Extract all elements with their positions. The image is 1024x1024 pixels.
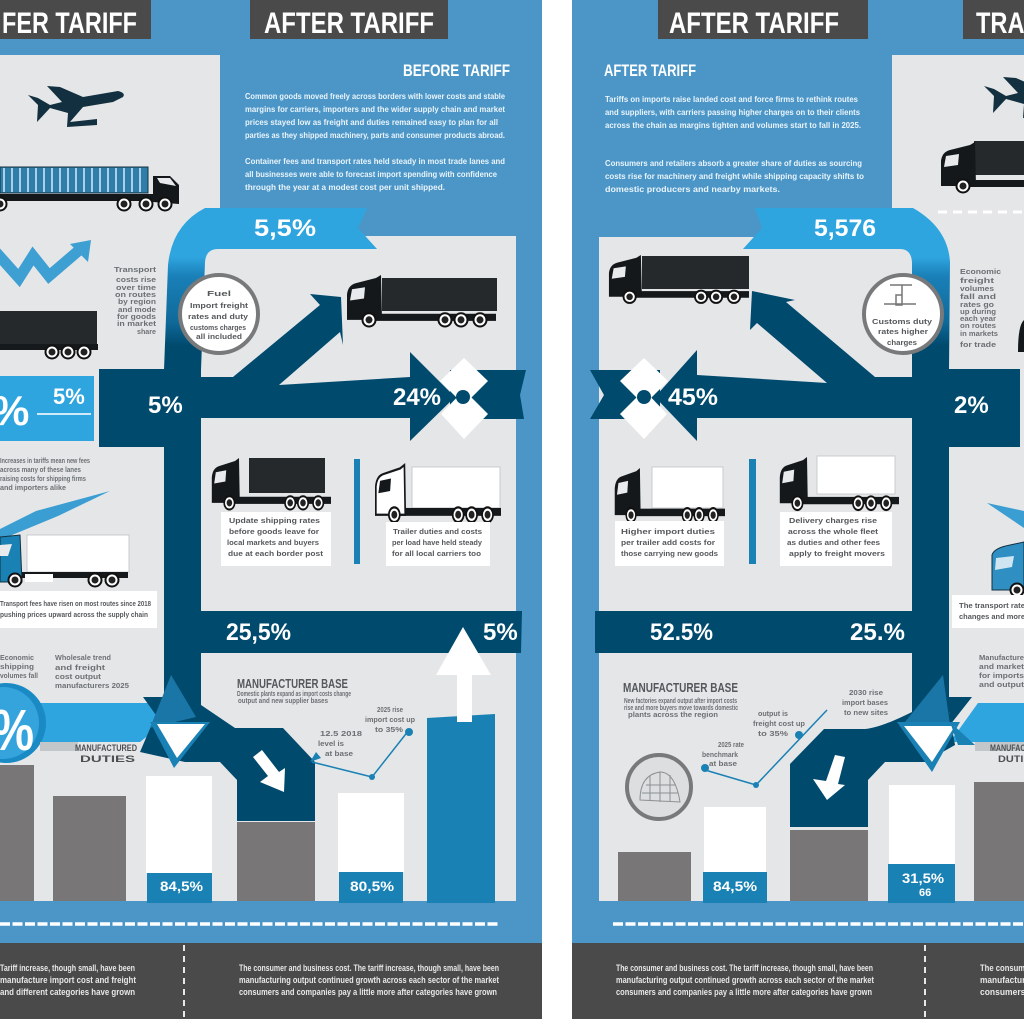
- card: right truck note one: [615, 521, 724, 566]
- callout: right circular badge with icon: [864, 275, 942, 353]
- label: left manufactured duties: [40, 742, 137, 764]
- divider: bottom dashed rule left: [0, 922, 500, 926]
- text block: before tariff description: Container fees and transport rates held steady in most trade lanes and: [245, 156, 505, 166]
- chart: left trend line with labels: level is: [318, 739, 344, 748]
- text block: right footer first column: consumers and companies pay a little more after categories have grown: [616, 987, 872, 998]
- value: band 52.5%: 52.5%: [650, 619, 713, 646]
- card: right truck note: for all local carriers too: [392, 549, 481, 558]
- divider: left vertical bar: [354, 459, 360, 564]
- divider: bottom dashed rule right: [613, 922, 1024, 926]
- card: right truck note two: as duties and other fees: [787, 538, 880, 547]
- icon: right clipped truck edge: [1018, 320, 1024, 352]
- text block: before tariff description: margins for carriers, importers and the wider supply chain and market: [245, 104, 505, 114]
- callout: left circular badge: all included: [196, 332, 242, 341]
- text block: right gray column: on routes: [960, 321, 996, 330]
- icon: left plane: [28, 86, 124, 127]
- text block: right manufacturer base: [623, 680, 738, 719]
- icon: right blue wedge: [987, 503, 1024, 528]
- text block: after tariff description: across the chain as margins tighten and volumes start to fall in 2025.: [605, 120, 861, 130]
- text block: left manufacturer base: output and new supplier bases: [238, 696, 328, 705]
- card: left truck note: before goods leave for: [229, 527, 319, 536]
- label: left manufactured duties: DUTIES: [80, 754, 135, 764]
- panel: right gray content area: [599, 55, 1024, 901]
- card: right truck note one: per trailer add costs for: [621, 538, 715, 547]
- bar chart: right bars: [618, 782, 1024, 903]
- card: right truck note two: [780, 512, 892, 566]
- callout: left circular badge: Fuel: [207, 289, 231, 298]
- text block: left small column two: cost output: [55, 672, 102, 681]
- card: left white note: pushing prices upward across the supply chain: [0, 610, 148, 619]
- text block: left footer second column: The consumer and business cost. The tariff increase, though small, have been: [239, 963, 499, 974]
- text block: left footer first column: Tariff increase, though small, have been: [0, 963, 135, 974]
- chart: left trend line with labels: to 35%: [375, 725, 403, 734]
- arrow: white up arrow: [436, 627, 491, 722]
- chart: right trend line with labels: to 35%: [758, 729, 788, 738]
- value: band 5%: 5%: [483, 619, 518, 646]
- icon: right white down arrow: [813, 755, 845, 800]
- text block: left footer first column: manufacture import cost and freight: [0, 975, 137, 986]
- card: right truck note: per load have held steady: [392, 538, 483, 547]
- value: right band 45%: 45%: [668, 384, 718, 411]
- text block: right footer first column: [616, 963, 875, 998]
- text block: right footer first column: manufacturing output continued growth across each sector of the market: [616, 975, 875, 986]
- value: band 25.%: 25.%: [850, 619, 905, 646]
- icon: right lower white truck one: [615, 467, 725, 523]
- card: right truck note two: Delivery charges rise: [789, 516, 877, 525]
- text block: left gray paragraph: [0, 456, 90, 492]
- panel: left gray content area: [0, 55, 516, 901]
- text block: left gray column: share: [137, 327, 156, 336]
- icon: lower dark truck: [212, 458, 331, 511]
- text block: left gray paragraph: across many of these lanes: [0, 465, 81, 474]
- value: right band 2%: 2%: [954, 392, 989, 419]
- text block: after tariff description: [605, 94, 864, 194]
- icon: left container truck: [0, 167, 179, 212]
- arrow: left top ribbon with vertical flow: [164, 208, 377, 370]
- text block: after tariff description: domestic producers and nearby markets.: [605, 184, 780, 194]
- card: left white note: Transport fees have risen on most routes since 2018: [0, 599, 151, 608]
- text block: left gray paragraph: and importers alike: [0, 483, 66, 492]
- divider: right dashed rule: [938, 210, 1024, 214]
- text block: after tariff description: and suppliers, with carriers passing higher charges on to their clients: [605, 107, 860, 117]
- text block: right footer first column: The consumer and business cost. The tariff increase, though small, have been: [616, 963, 873, 974]
- chart: left trend line with labels: 12.5 2018: [320, 729, 362, 738]
- text block: left small column one: volumes fall: [0, 671, 38, 680]
- text block: after tariff description: costs rise for machinery and freight while shipping capacity shifts to: [605, 171, 864, 181]
- text block: left gray column: Transport: [114, 265, 157, 274]
- text block: left gray paragraph: raising costs for shipping firms: [0, 474, 86, 483]
- value: bar 31.5% right: 31,5%: [902, 870, 945, 886]
- callout: right circular badge with icon: charges: [887, 338, 917, 347]
- icon: left clipped dark truck: [0, 311, 98, 360]
- text block: before tariff description: [245, 91, 505, 192]
- text block: left gray column: costs rise: [116, 275, 156, 284]
- text block: right gray column: [960, 267, 1001, 349]
- chart: right trend line with labels: benchmark: [702, 750, 739, 759]
- label: right manufactured duties: [975, 742, 1024, 764]
- text block: before tariff description: all businesses were able to forecast import spending with confidence: [245, 169, 497, 179]
- text block: right small column: Manufacture: [979, 653, 1024, 662]
- text block: left small column one: shipping: [0, 662, 34, 671]
- text block: right gray column: up during: [960, 307, 996, 316]
- text block: left footer second column: [239, 963, 500, 998]
- heading tab: clipped right trade: [963, 0, 1024, 40]
- text block: right manufacturer base: plants across the region: [628, 710, 718, 719]
- text block: left gray column: and mode: [118, 305, 156, 314]
- icon: right blue truck: [992, 542, 1024, 598]
- heading tab: left clipped after tariff: FER TARIFF: [2, 7, 137, 40]
- icon: left blue truck with white trailer: [0, 535, 129, 588]
- label: left manufactured duties: MANUFACTURED: [75, 743, 137, 753]
- value: bar 31.5% right: [902, 870, 945, 899]
- text block: right manufacturer base: MANUFACTURER BASE: [623, 680, 738, 695]
- card: left truck note: [221, 512, 331, 566]
- text block: left footer first column: and different categories have grown: [0, 987, 135, 998]
- chart: right trend line with labels: 2030 rise: [849, 688, 883, 697]
- value: band 25.5%: 25,5%: [226, 619, 291, 646]
- card: left white note: [0, 591, 157, 628]
- text block: after tariff description: Consumers and retailers absorb a greater share of duties as sourcing: [605, 158, 862, 168]
- icon: right dark truck: [609, 255, 749, 304]
- text block: left footer second column: manufacturing output continued growth across each sector of the market: [239, 975, 500, 986]
- callout: left circular badge: rates and duty: [188, 312, 249, 321]
- heading tab: after tariff: [250, 0, 448, 40]
- text block: right gray column: volumes: [960, 284, 994, 293]
- text block: right small column: for imports: [979, 671, 1024, 680]
- chart: left trend line with labels: at base: [325, 749, 353, 758]
- text block: before tariff description: prices stayed low as freight and duties remained easy to plan for all: [245, 117, 498, 127]
- icon: right diamond marker: [620, 358, 668, 439]
- bar chart: left bars: [0, 714, 495, 903]
- text block: left small column one: Economic: [0, 653, 34, 662]
- text block: left manufacturer base: MANUFACTURER BASE: [237, 676, 348, 691]
- text block: right small column: [979, 653, 1024, 689]
- callout: right circular badge with icon: rates higher: [878, 327, 928, 336]
- text block: right small column: and market: [979, 662, 1024, 671]
- callout: left circular badge: customs charges: [190, 323, 246, 332]
- card: right truck note two: across the whole fleet: [788, 527, 879, 536]
- text block: right gray column: Economic: [960, 267, 1001, 276]
- arrow: left bent navy flow into bar: [140, 705, 315, 821]
- chart: right trend line with labels: to new sites: [844, 708, 888, 717]
- text block: left gray column: [114, 265, 157, 336]
- callout: left circular badge: [180, 275, 258, 353]
- callout: left circular badge: Import freight: [190, 301, 249, 310]
- arrow: left light blue ribbon: [30, 703, 165, 742]
- text block: before tariff description: Common goods moved freely across borders with lower costs and stable: [245, 91, 505, 101]
- text block: left gray paragraph: Increases in tariffs mean new fees: [0, 456, 90, 465]
- text block: left gray column: for goods: [117, 312, 156, 321]
- text block: left manufacturer base: [237, 676, 351, 705]
- text block: right footer second column: [980, 963, 1024, 998]
- value: bar 80.5%: 80,5%: [350, 878, 395, 894]
- card: left truck note: due at each border post: [228, 549, 324, 558]
- arrow: right navy flow with horizontal arrow and diagonal branch: [590, 291, 1020, 715]
- text block: before tariff description: through the year at a modest cost per unit shipped.: [245, 182, 445, 192]
- panel: left bottom dark footer: [0, 943, 542, 1019]
- text block: right manufacturer base: rise and more buyers move towards domestic: [624, 703, 738, 712]
- card: right white note: The transport rate: [959, 601, 1024, 610]
- text block: right gray column: fall and: [960, 292, 997, 301]
- text block: left small column two: [55, 653, 129, 690]
- value: bar 84.5% right: 84,5%: [713, 878, 758, 894]
- text block: left footer second column: consumers and companies pay a little more after categories have grown: [239, 987, 497, 998]
- icon: left diamond marker: [440, 358, 488, 439]
- icon: lower white truck: [376, 465, 501, 523]
- chart: right trend line with labels: freight cost up: [753, 719, 805, 728]
- text block: left gray column: in market: [117, 319, 157, 328]
- text block: right gray column: in markets: [960, 329, 998, 338]
- icon: left white diagonal arrow: [253, 750, 285, 792]
- text block: left small column two: Wholesale trend: [55, 653, 111, 662]
- text block: right gray column: freight: [960, 276, 995, 285]
- text block: right gray column: for trade: [960, 340, 996, 349]
- chart: right trend line with labels: import bases: [842, 698, 888, 707]
- text block: left small column two: manufacturers 2025: [55, 681, 129, 690]
- chart: right trend line with labels: at base: [709, 759, 737, 768]
- divider: right vertical bar: [749, 459, 756, 564]
- panel: right bottom dark footer: [572, 943, 1024, 1019]
- heading tab: right after tariff: AFTER TARIFF: [669, 7, 839, 40]
- panel: right blue background: [572, 0, 1024, 1019]
- card: right truck note one: Higher import duties: [621, 527, 715, 536]
- icon: left down triangle star: [143, 675, 210, 768]
- card: right truck note two: apply to freight movers: [789, 549, 885, 558]
- arrow: right top ribbon with vertical flow: [743, 208, 950, 370]
- card: right white note: changes and more: [959, 612, 1024, 621]
- value: right ribbon percent: 5,576: [814, 215, 876, 242]
- callout: blue percent box: 5%: [53, 384, 85, 409]
- card: right white note: [952, 595, 1024, 628]
- arrow: right bent navy flow into bar: [790, 712, 955, 827]
- text block: left footer first column: [0, 963, 137, 998]
- chart: left trend line with labels: 2025 rise: [377, 705, 403, 714]
- icon: right plane: [984, 77, 1024, 118]
- text block: left gray column: on routes: [115, 290, 156, 299]
- subheading: after tariff: AFTER TARIFF: [604, 61, 696, 80]
- text block: left gray column: by region: [118, 297, 156, 306]
- chart: right trend line with labels: [701, 688, 888, 788]
- text block: right gray column: each year: [960, 314, 996, 323]
- card: right truck note: Trailer duties and costs: [393, 527, 482, 536]
- panel: left blue background: [0, 0, 542, 1019]
- card: left truck note: Update shipping rates: [229, 516, 320, 525]
- text block: left manufacturer base: Domestic plants expand as import costs change: [237, 689, 351, 698]
- callout: right circular badge with icon: Customs duty: [872, 317, 933, 326]
- icon: right lower white truck two: [780, 456, 899, 511]
- icon: top right gray-panel truck: [941, 141, 1024, 194]
- callout: blue percent box: [0, 376, 94, 441]
- icon: right down triangle star: [897, 675, 975, 772]
- card: right truck note one: those carrying new goods: [621, 549, 718, 558]
- chart: left trend line with labels: [310, 705, 415, 780]
- text block: right gray column: rates go: [960, 300, 994, 309]
- chart: right trend line with labels: 2025 rate: [718, 740, 744, 749]
- value: left band 5%: 5%: [148, 392, 183, 419]
- value: band 24%: 24%: [393, 384, 441, 411]
- text block: right small column: and output: [979, 680, 1024, 689]
- icon: center dark truck: [347, 275, 497, 328]
- text block: before tariff description: parties as they shipped machinery, parts and consumer products abroad.: [245, 130, 505, 140]
- chart: left trend line with labels: import cost up: [365, 715, 415, 724]
- card: right truck note: [386, 522, 490, 566]
- icon: zigzag trend arrow: [0, 240, 91, 278]
- value: left ribbon percent: 5,5%: [254, 215, 316, 242]
- text block: left small column one: [0, 653, 38, 680]
- text block: left gray column: over time: [116, 283, 156, 292]
- card: left truck note: local markets and buyers: [227, 538, 319, 547]
- arrow: left navy flow with horizontal arrow and diagonal branch: [99, 294, 526, 715]
- heading tab: after tariff: AFTER TARIFF: [264, 7, 434, 40]
- value: bar 84.5%: 84,5%: [160, 878, 204, 894]
- icon: right machinery circle: [627, 755, 691, 819]
- chart: right trend line with labels: output is: [758, 709, 788, 718]
- text block: left small column two: and freight: [55, 663, 106, 672]
- icon: left blue wedge: [0, 491, 110, 540]
- text block: right manufacturer base: New factories expand output after import costs: [624, 696, 737, 705]
- arrow: right light blue ribbon: [950, 703, 1024, 742]
- subheading: before tariff: BEFORE TARIFF: [403, 61, 510, 80]
- value: bar 31.5% right: 66: [919, 887, 931, 899]
- text block: after tariff description: Tariffs on imports raise landed cost and force firms to rethink routes: [605, 94, 858, 104]
